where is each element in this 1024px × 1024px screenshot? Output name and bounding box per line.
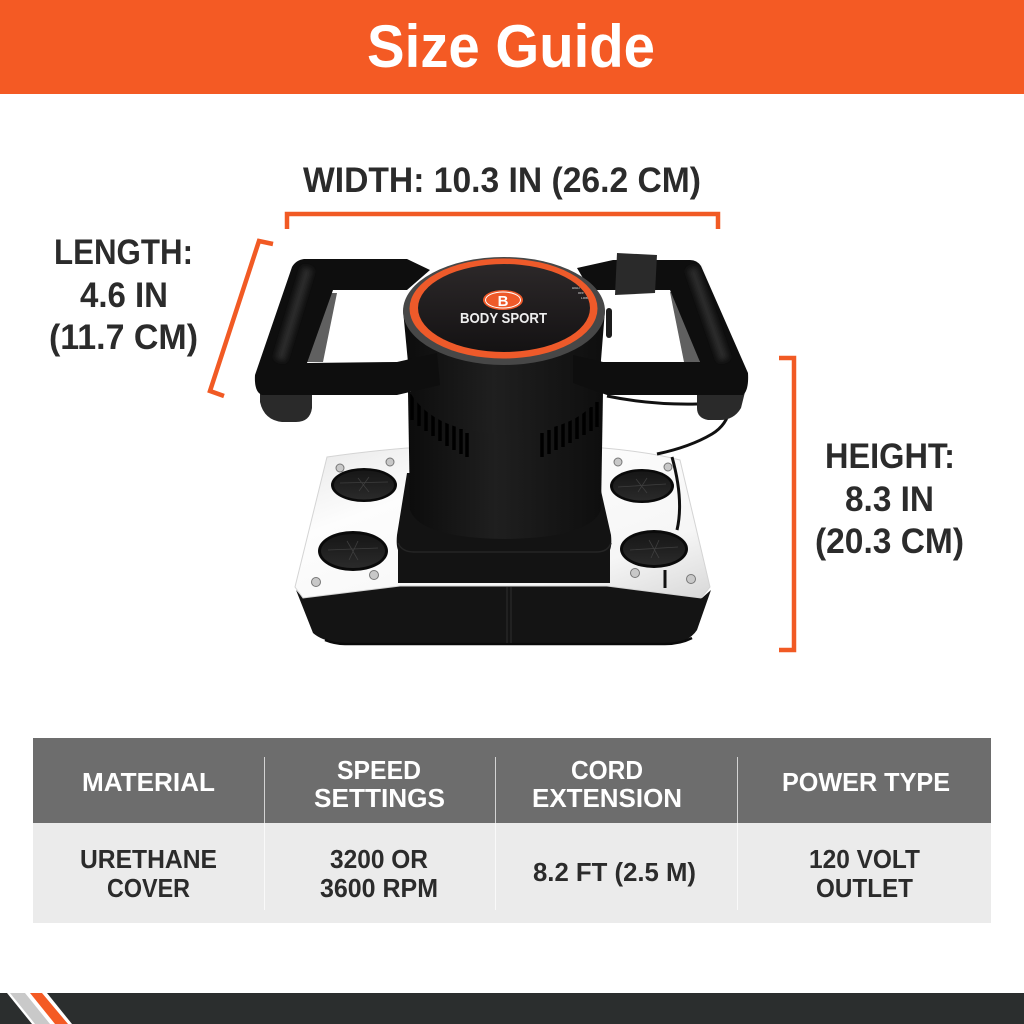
screws	[312, 458, 696, 586]
product: massager	[255, 253, 748, 644]
orange ring	[410, 258, 598, 358]
right grey strip	[670, 292, 700, 362]
rubber pads	[318, 468, 688, 571]
speed labels	[572, 286, 588, 300]
cord extension column: CORD	[571, 755, 643, 785]
material column: MATERIAL	[82, 767, 215, 797]
header banner	[0, 0, 1024, 94]
length dimension: LENGTH:	[54, 233, 193, 272]
height dimension: 8.3 IN	[845, 480, 934, 519]
height dimension	[779, 358, 964, 650]
speed labels: LOW	[581, 296, 588, 300]
logo badge: B	[498, 293, 509, 310]
brand name: BODY SPORT	[460, 310, 547, 327]
left grey strip	[307, 293, 337, 362]
cord extension column: 8.2 FT (2.5 M)	[533, 857, 696, 887]
base seam	[507, 587, 511, 643]
specs table	[33, 738, 991, 923]
right handle	[573, 260, 748, 395]
base sole	[325, 638, 692, 644]
velcro strap	[615, 253, 657, 295]
right grip highlight	[692, 268, 724, 360]
left grip highlight	[280, 268, 308, 360]
speed labels: HIGH	[572, 286, 580, 290]
power type column: POWER TYPE	[782, 767, 950, 797]
top control disc	[403, 257, 605, 365]
power type column: 120 VOLT	[809, 844, 920, 874]
vent slots	[412, 394, 597, 457]
left foot	[260, 392, 312, 422]
material column: COVER	[107, 873, 190, 903]
height dimension: (20.3 CM)	[815, 522, 964, 561]
title: Size Guide	[367, 13, 655, 80]
speed settings column: SPEED	[337, 755, 421, 785]
speed settings column	[314, 755, 445, 903]
upper housing	[403, 310, 605, 434]
height dimension: HEIGHT:	[825, 437, 955, 476]
square mount	[397, 473, 611, 583]
right foot	[697, 392, 745, 420]
material column	[80, 767, 217, 903]
power type column	[782, 767, 950, 903]
power type column: OUTLET	[816, 873, 913, 903]
side switch	[606, 308, 612, 338]
leather base	[296, 584, 711, 643]
speed settings column: SETTINGS	[314, 783, 445, 813]
width dimension: WIDTH: 10.3 IN (26.2 CM)	[303, 161, 701, 200]
logo badge	[483, 290, 523, 310]
length dimension: (11.7 CM)	[49, 318, 198, 357]
chrome plate	[295, 448, 710, 598]
material column: URETHANE	[80, 844, 217, 874]
speed settings column: 3200 OR	[330, 844, 428, 874]
speed settings column: 3600 RPM	[320, 873, 438, 903]
width dimension	[287, 161, 718, 229]
cord extension column: EXTENSION	[532, 783, 682, 813]
left handle	[255, 259, 440, 395]
length dimension: 4.6 IN	[80, 276, 168, 315]
speed labels: OFF	[578, 291, 584, 295]
black face	[418, 264, 590, 352]
power cord	[607, 396, 730, 588]
cord extension column	[532, 755, 696, 887]
footer band	[0, 993, 1024, 1024]
length dimension	[49, 233, 273, 396]
lower cylinder	[408, 392, 603, 539]
